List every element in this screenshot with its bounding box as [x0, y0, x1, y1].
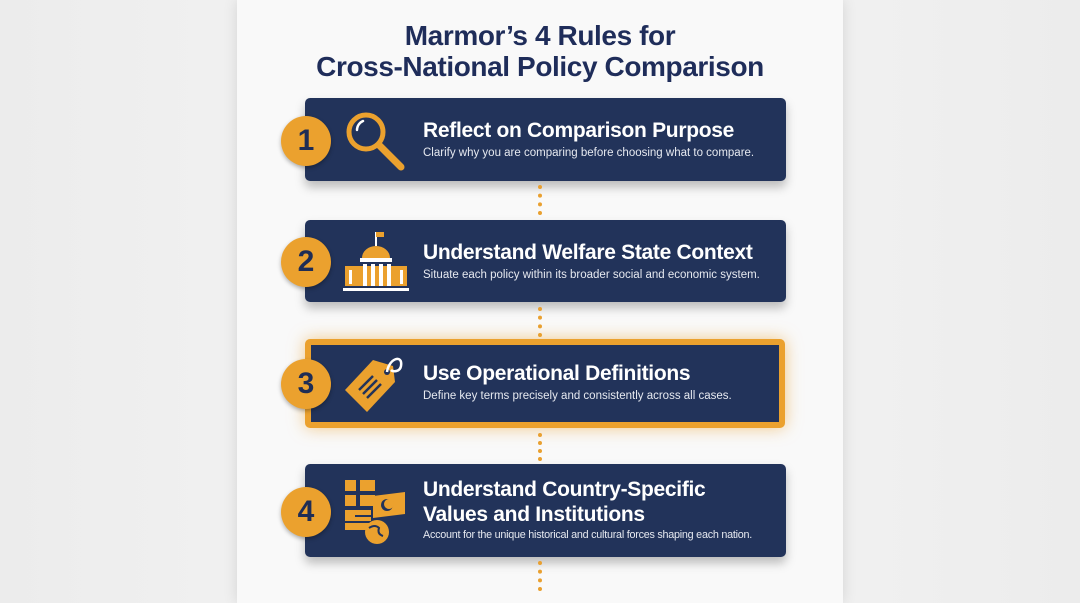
number 3: [281, 359, 331, 409]
card 2: [305, 220, 786, 302]
icon: government building: [343, 232, 409, 291]
number 2: 2: [298, 245, 314, 278]
card 1: Clarify why you are comparing before choosing what to compare.: [423, 147, 754, 159]
dots 1: [538, 185, 542, 215]
card 4: Understand Country-Specific: [423, 478, 705, 501]
card 2: Understand Welfare State Context: [423, 241, 753, 264]
card 3 highlighted: [305, 339, 785, 428]
icon: flags and globe: [345, 480, 405, 544]
card 3 highlighted: Define key terms precisely and consistently across all cases.: [423, 390, 732, 402]
card 4: Account for the unique historical and cultural forces shaping each nation.: [423, 529, 752, 541]
card 3 highlighted: Use Operational Definitions: [423, 362, 690, 385]
title: Cross-National Policy Comparison: [316, 51, 764, 82]
icon: magnifier: [346, 112, 404, 170]
number 1: 1: [298, 124, 314, 157]
number 4: [281, 487, 331, 537]
card 1: Reflect on Comparison Purpose: [423, 119, 734, 142]
card 1: [305, 98, 786, 181]
title: [316, 20, 764, 82]
dots 2: [538, 307, 542, 337]
card 4: [305, 464, 786, 557]
number 3: 3: [298, 367, 314, 400]
card 4: Values and Institutions: [423, 503, 645, 526]
number 1: [281, 116, 331, 166]
title: Marmor’s 4 Rules for: [405, 20, 675, 51]
number 2: [281, 237, 331, 287]
card 2: Situate each policy within its broader social and economic system.: [423, 269, 760, 281]
icon: tag: [345, 358, 402, 412]
number 4: 4: [298, 495, 314, 528]
dots 3: [538, 433, 542, 461]
dots 4: [538, 561, 542, 591]
